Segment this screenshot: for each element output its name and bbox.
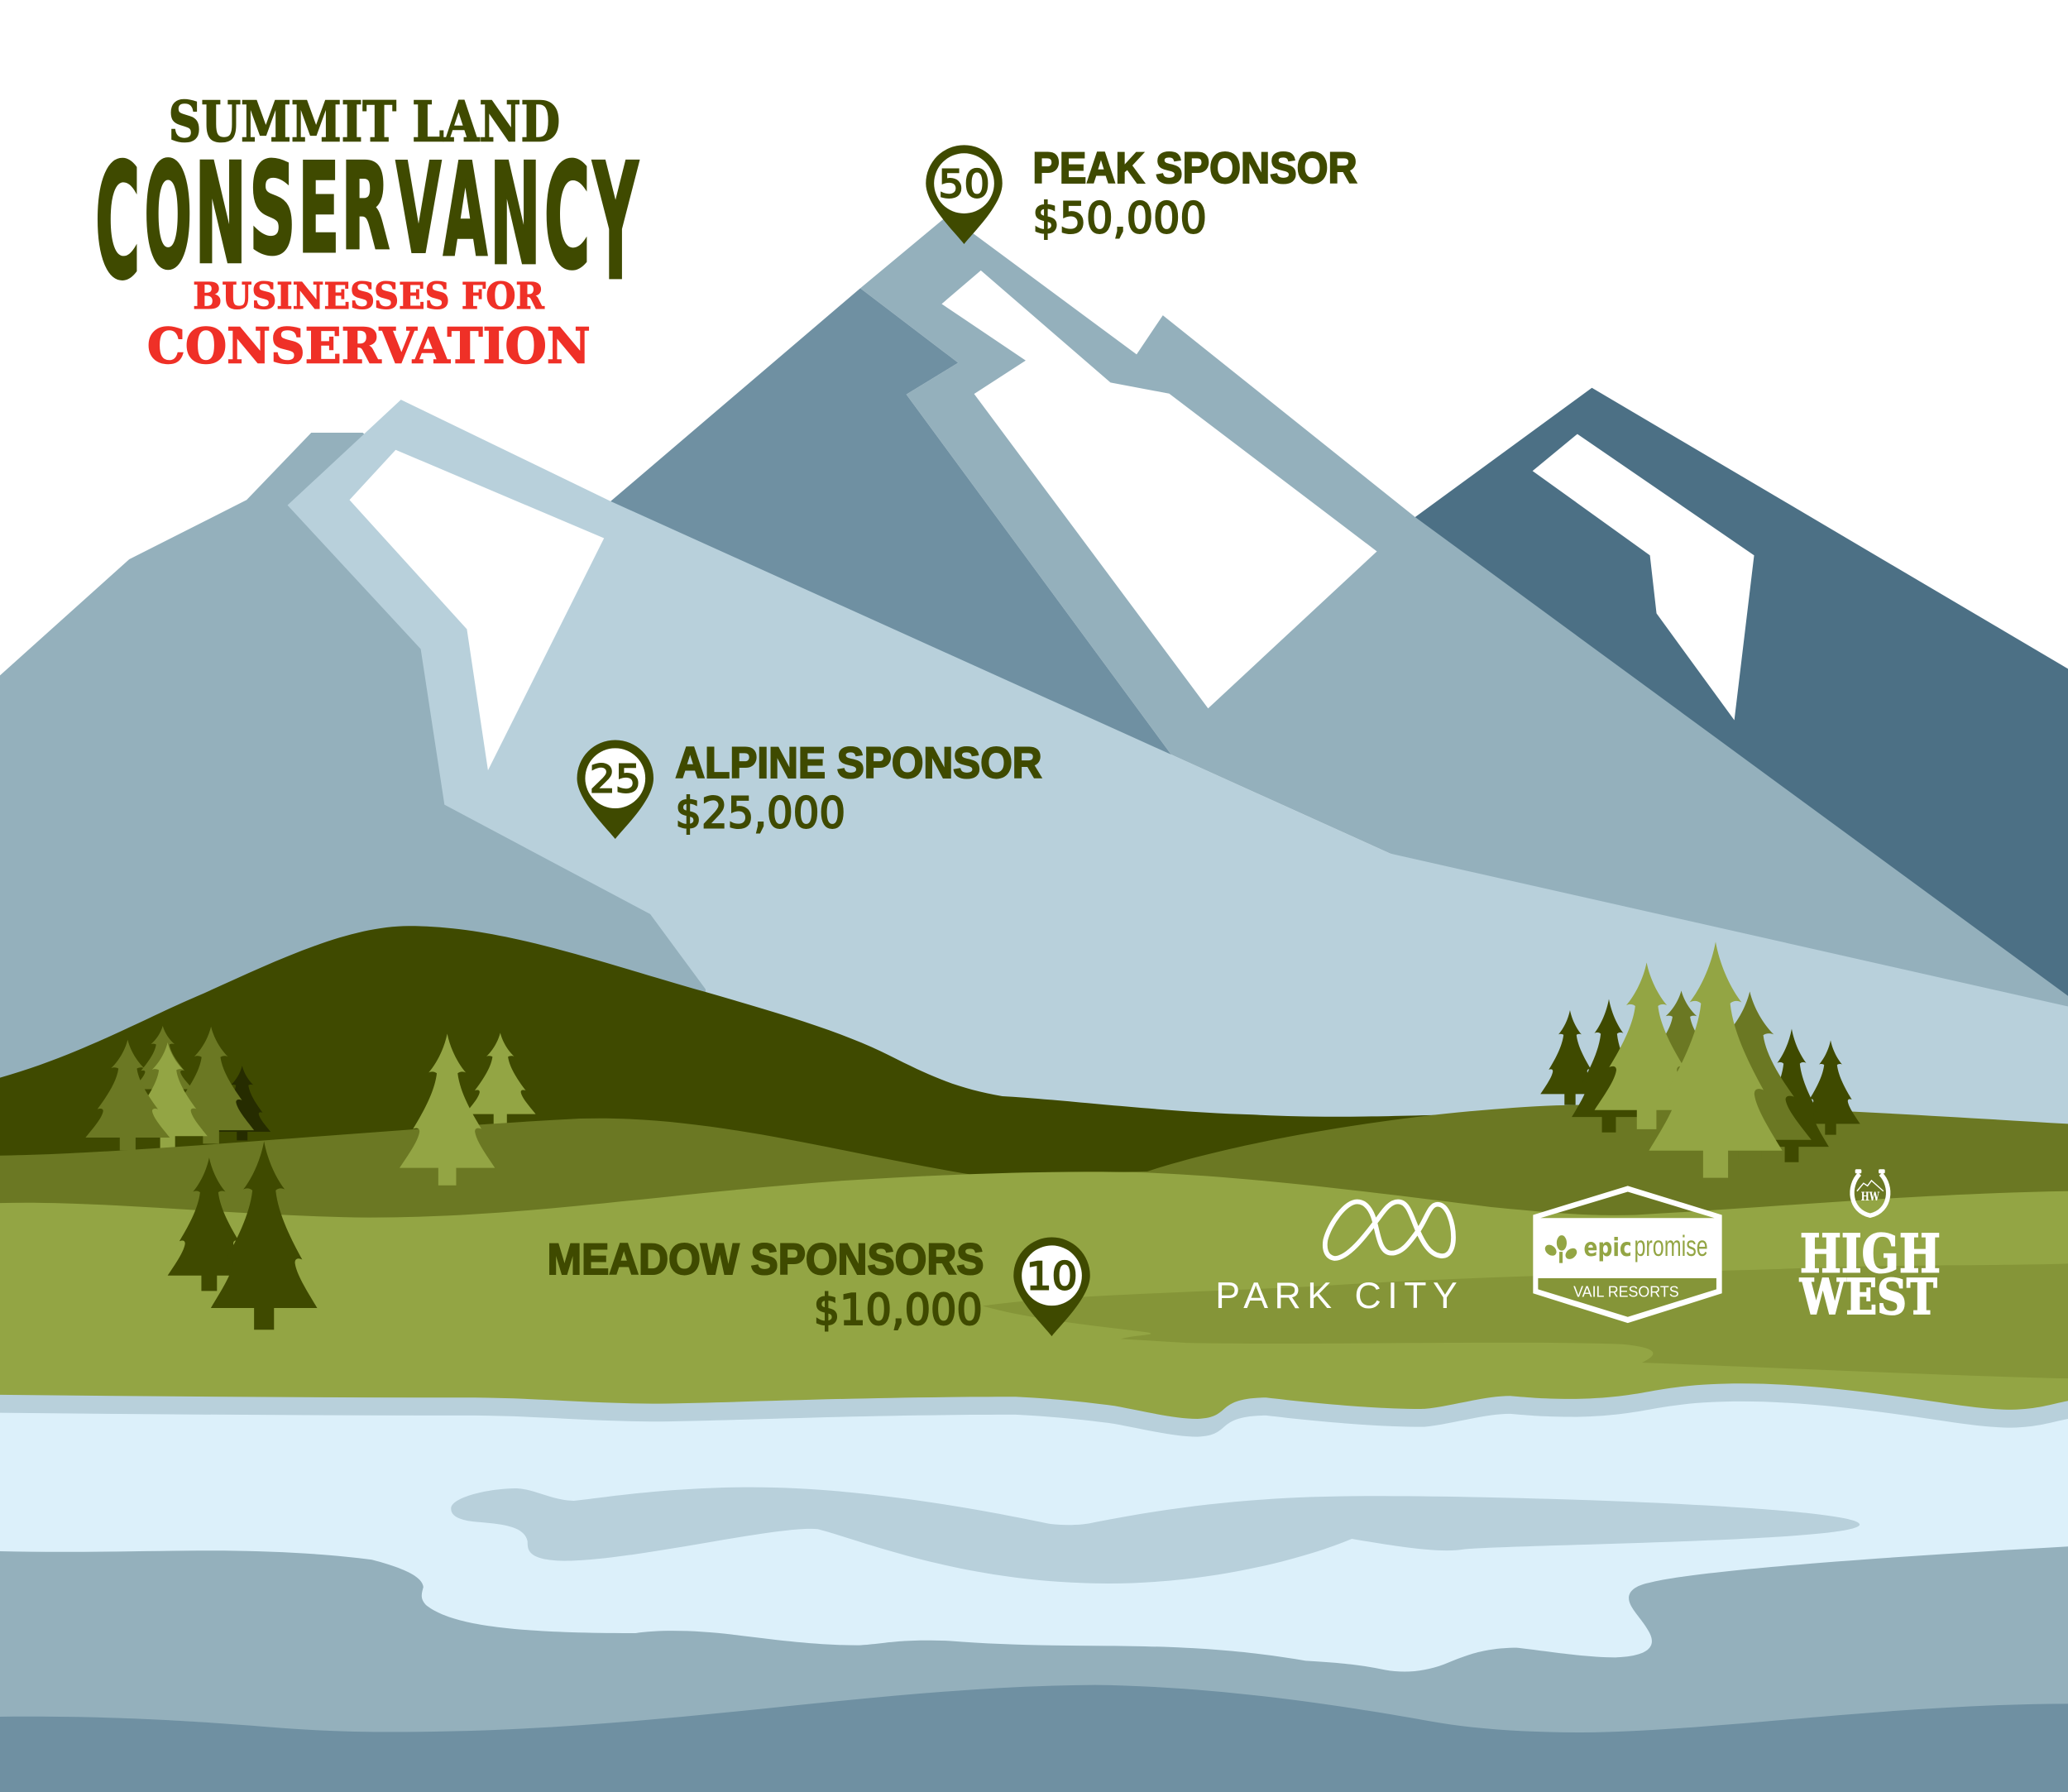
title line: Conservancy: N bbox=[194, 134, 247, 295]
far right dark mountain bbox=[1415, 388, 2068, 1056]
amount: 10,000: $10,000 bbox=[814, 1286, 983, 1335]
title bbox=[95, 89, 639, 374]
label: meadow sponsors: MEADOW SPONSORS bbox=[548, 1235, 984, 1284]
pin: 50: 50 bbox=[938, 161, 990, 206]
infographic scene: Y bbox=[592, 129, 639, 316]
label: peak sponsor: PEAK SPONSOR bbox=[1032, 144, 1357, 193]
title line: Conservancy: A bbox=[443, 136, 487, 285]
leaf icon bbox=[1543, 1235, 1579, 1263]
title line: Conservancy: R bbox=[341, 137, 390, 276]
peak sponsor bbox=[926, 144, 1357, 244]
tree cluster behind hill bbox=[85, 1026, 536, 1150]
title line: Conservancy: S bbox=[249, 136, 296, 282]
epicpromise wordmark: promise bbox=[1634, 1230, 1708, 1263]
title line: Conservancy: V bbox=[395, 137, 441, 281]
snow cap: center peak bbox=[941, 271, 1377, 708]
amount: 25,000: $25,000 bbox=[675, 788, 845, 838]
amount: 50,000: $50,000 bbox=[1032, 194, 1207, 243]
mid green hills bbox=[0, 1104, 2068, 1451]
title line: Businesses for: BUSINESSES FOR bbox=[193, 276, 544, 318]
bright green meadow bbox=[0, 1172, 2068, 1451]
label: alpine sponsor: ALPINE SPONSOR bbox=[675, 739, 1042, 788]
center peak mountain bbox=[610, 215, 2068, 1056]
title line: Conservancy: N bbox=[490, 133, 541, 296]
meadow dark trees bbox=[168, 1141, 317, 1330]
alpine sponsor bbox=[577, 739, 1042, 839]
Vail Resorts wordmark: VAIL RESORTS bbox=[1573, 1282, 1679, 1300]
snow cap: left peak bbox=[350, 450, 604, 770]
title line: Summit Land: SUMMIT LAND bbox=[169, 89, 560, 155]
dark green hill bbox=[0, 926, 1451, 1319]
logo: Park City bbox=[1215, 1201, 1458, 1316]
pin: 10: 10 bbox=[1026, 1254, 1078, 1299]
left front mountain bbox=[0, 400, 2068, 1187]
pin: 25: 25 bbox=[590, 756, 641, 801]
title line: Conservancy: O bbox=[144, 132, 192, 301]
pin: 10 bbox=[1013, 1238, 1090, 1336]
tree on mid hill bbox=[400, 1033, 495, 1186]
river and lake bbox=[0, 1383, 2068, 1792]
pin: 50 bbox=[926, 145, 1003, 244]
horseshoe icon: HW bbox=[1861, 1191, 1880, 1204]
High wordmark: HIGH bbox=[1800, 1223, 1941, 1285]
right tree cluster bbox=[1540, 942, 1860, 1178]
meadow shadow bbox=[983, 1263, 2068, 1378]
snow cap: right peak bbox=[1533, 434, 1754, 721]
horseshoe icon bbox=[1852, 1169, 1888, 1215]
Park City swirl bbox=[1325, 1201, 1453, 1258]
logo: High West bbox=[1799, 1169, 1941, 1325]
title line: Conservation: CONSERVATION bbox=[147, 317, 591, 374]
West wordmark: WEST bbox=[1799, 1268, 1937, 1325]
meadow sponsors bbox=[548, 1235, 1090, 1336]
pin: 25 bbox=[577, 740, 653, 839]
epicpromise wordmark: epic bbox=[1584, 1234, 1632, 1263]
title line: Conservancy: C bbox=[544, 133, 590, 302]
title line: Conservancy: C bbox=[95, 131, 140, 315]
hexagon badge bbox=[1533, 1186, 1722, 1323]
Park City wordmark: PARK CITY bbox=[1215, 1276, 1458, 1316]
logo: Epic Promise bbox=[1533, 1186, 1722, 1323]
title line: Conservancy: E bbox=[298, 137, 339, 281]
